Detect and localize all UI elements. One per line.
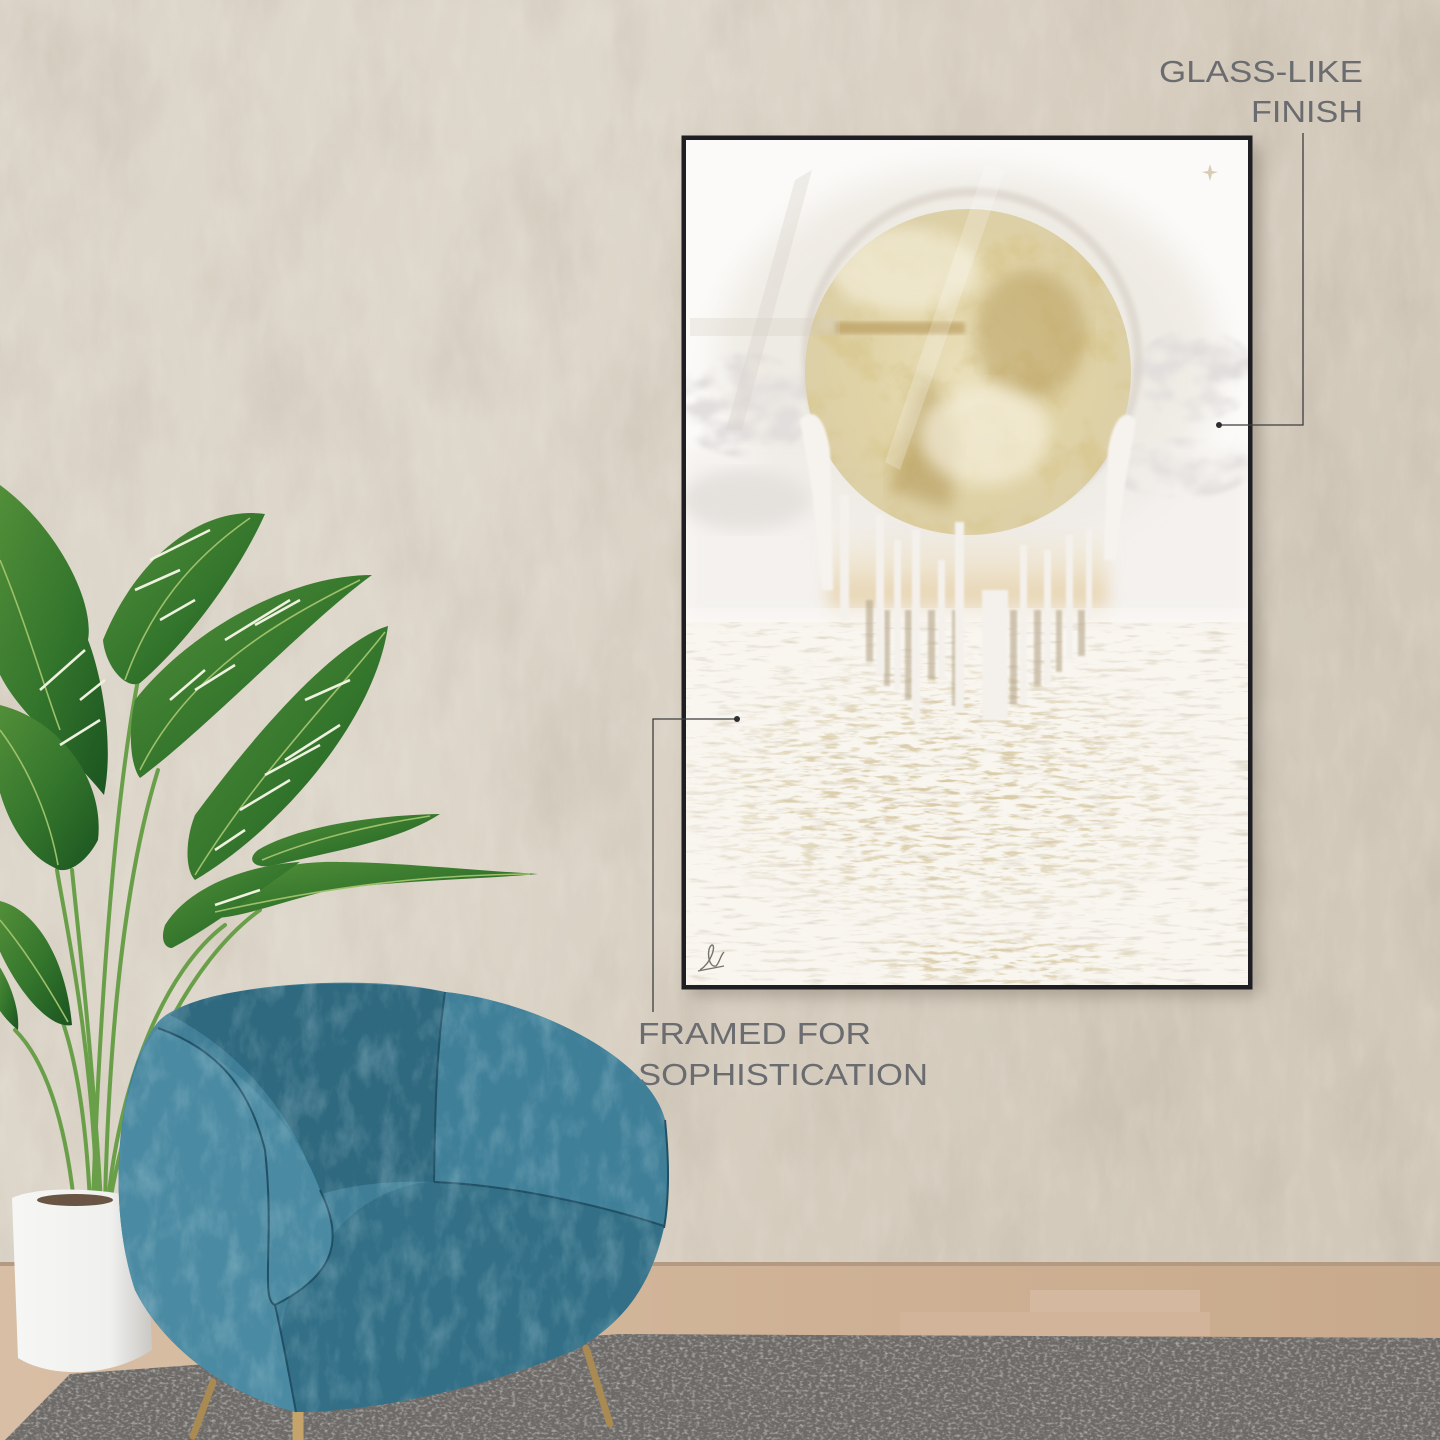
- frame: [684, 138, 1250, 987]
- right back panel: [434, 992, 667, 1226]
- gold horizon glow: [820, 538, 1116, 617]
- moon: [805, 209, 1131, 535]
- chair legs: [193, 1348, 610, 1440]
- plant stems: [15, 680, 260, 1202]
- callout: framed for sophistication: [638, 716, 928, 1092]
- piping seams: [158, 992, 668, 1412]
- callout text: SOPHISTICATION: [638, 1057, 928, 1092]
- pot: [12, 1190, 152, 1372]
- star: [1202, 164, 1218, 181]
- leader line: [653, 716, 740, 1012]
- seat cushion: [281, 1182, 664, 1412]
- blue velvet armchair: [119, 983, 669, 1440]
- wood floor: [0, 1262, 1440, 1440]
- white drips: [839, 520, 1093, 721]
- leaf midribs: [0, 518, 530, 1022]
- velvet texture: [119, 983, 669, 1412]
- leader line: [1216, 133, 1303, 428]
- frame shadow: [690, 146, 1260, 996]
- framed artwork: [673, 138, 1260, 996]
- callout: glass-like finish: [1159, 54, 1363, 428]
- signature: [698, 945, 724, 971]
- left arm: [119, 1028, 333, 1412]
- leaf highlights: [40, 530, 350, 905]
- leaves: [0, 485, 538, 1030]
- back inner panel: [170, 984, 445, 1195]
- clouds: [686, 355, 806, 456]
- dark drips: [866, 600, 1085, 706]
- sea surface: [686, 622, 1248, 985]
- callout text: FRAMED FOR: [638, 1016, 871, 1051]
- artwork image: [673, 140, 1257, 985]
- callout text: GLASS-LIKE: [1159, 54, 1363, 89]
- light streaks: [726, 170, 812, 430]
- white drips at the moon sides: [800, 414, 1136, 590]
- callout text: [638, 1016, 928, 1092]
- callout text: FINISH: [1251, 94, 1363, 129]
- potted plant: [0, 485, 538, 1372]
- moon halo ring: [806, 192, 1138, 524]
- chair body: [119, 983, 669, 1412]
- callout text: [1159, 54, 1363, 129]
- grey shag rug: [5, 1334, 1440, 1440]
- haze around the moon: [716, 167, 1218, 468]
